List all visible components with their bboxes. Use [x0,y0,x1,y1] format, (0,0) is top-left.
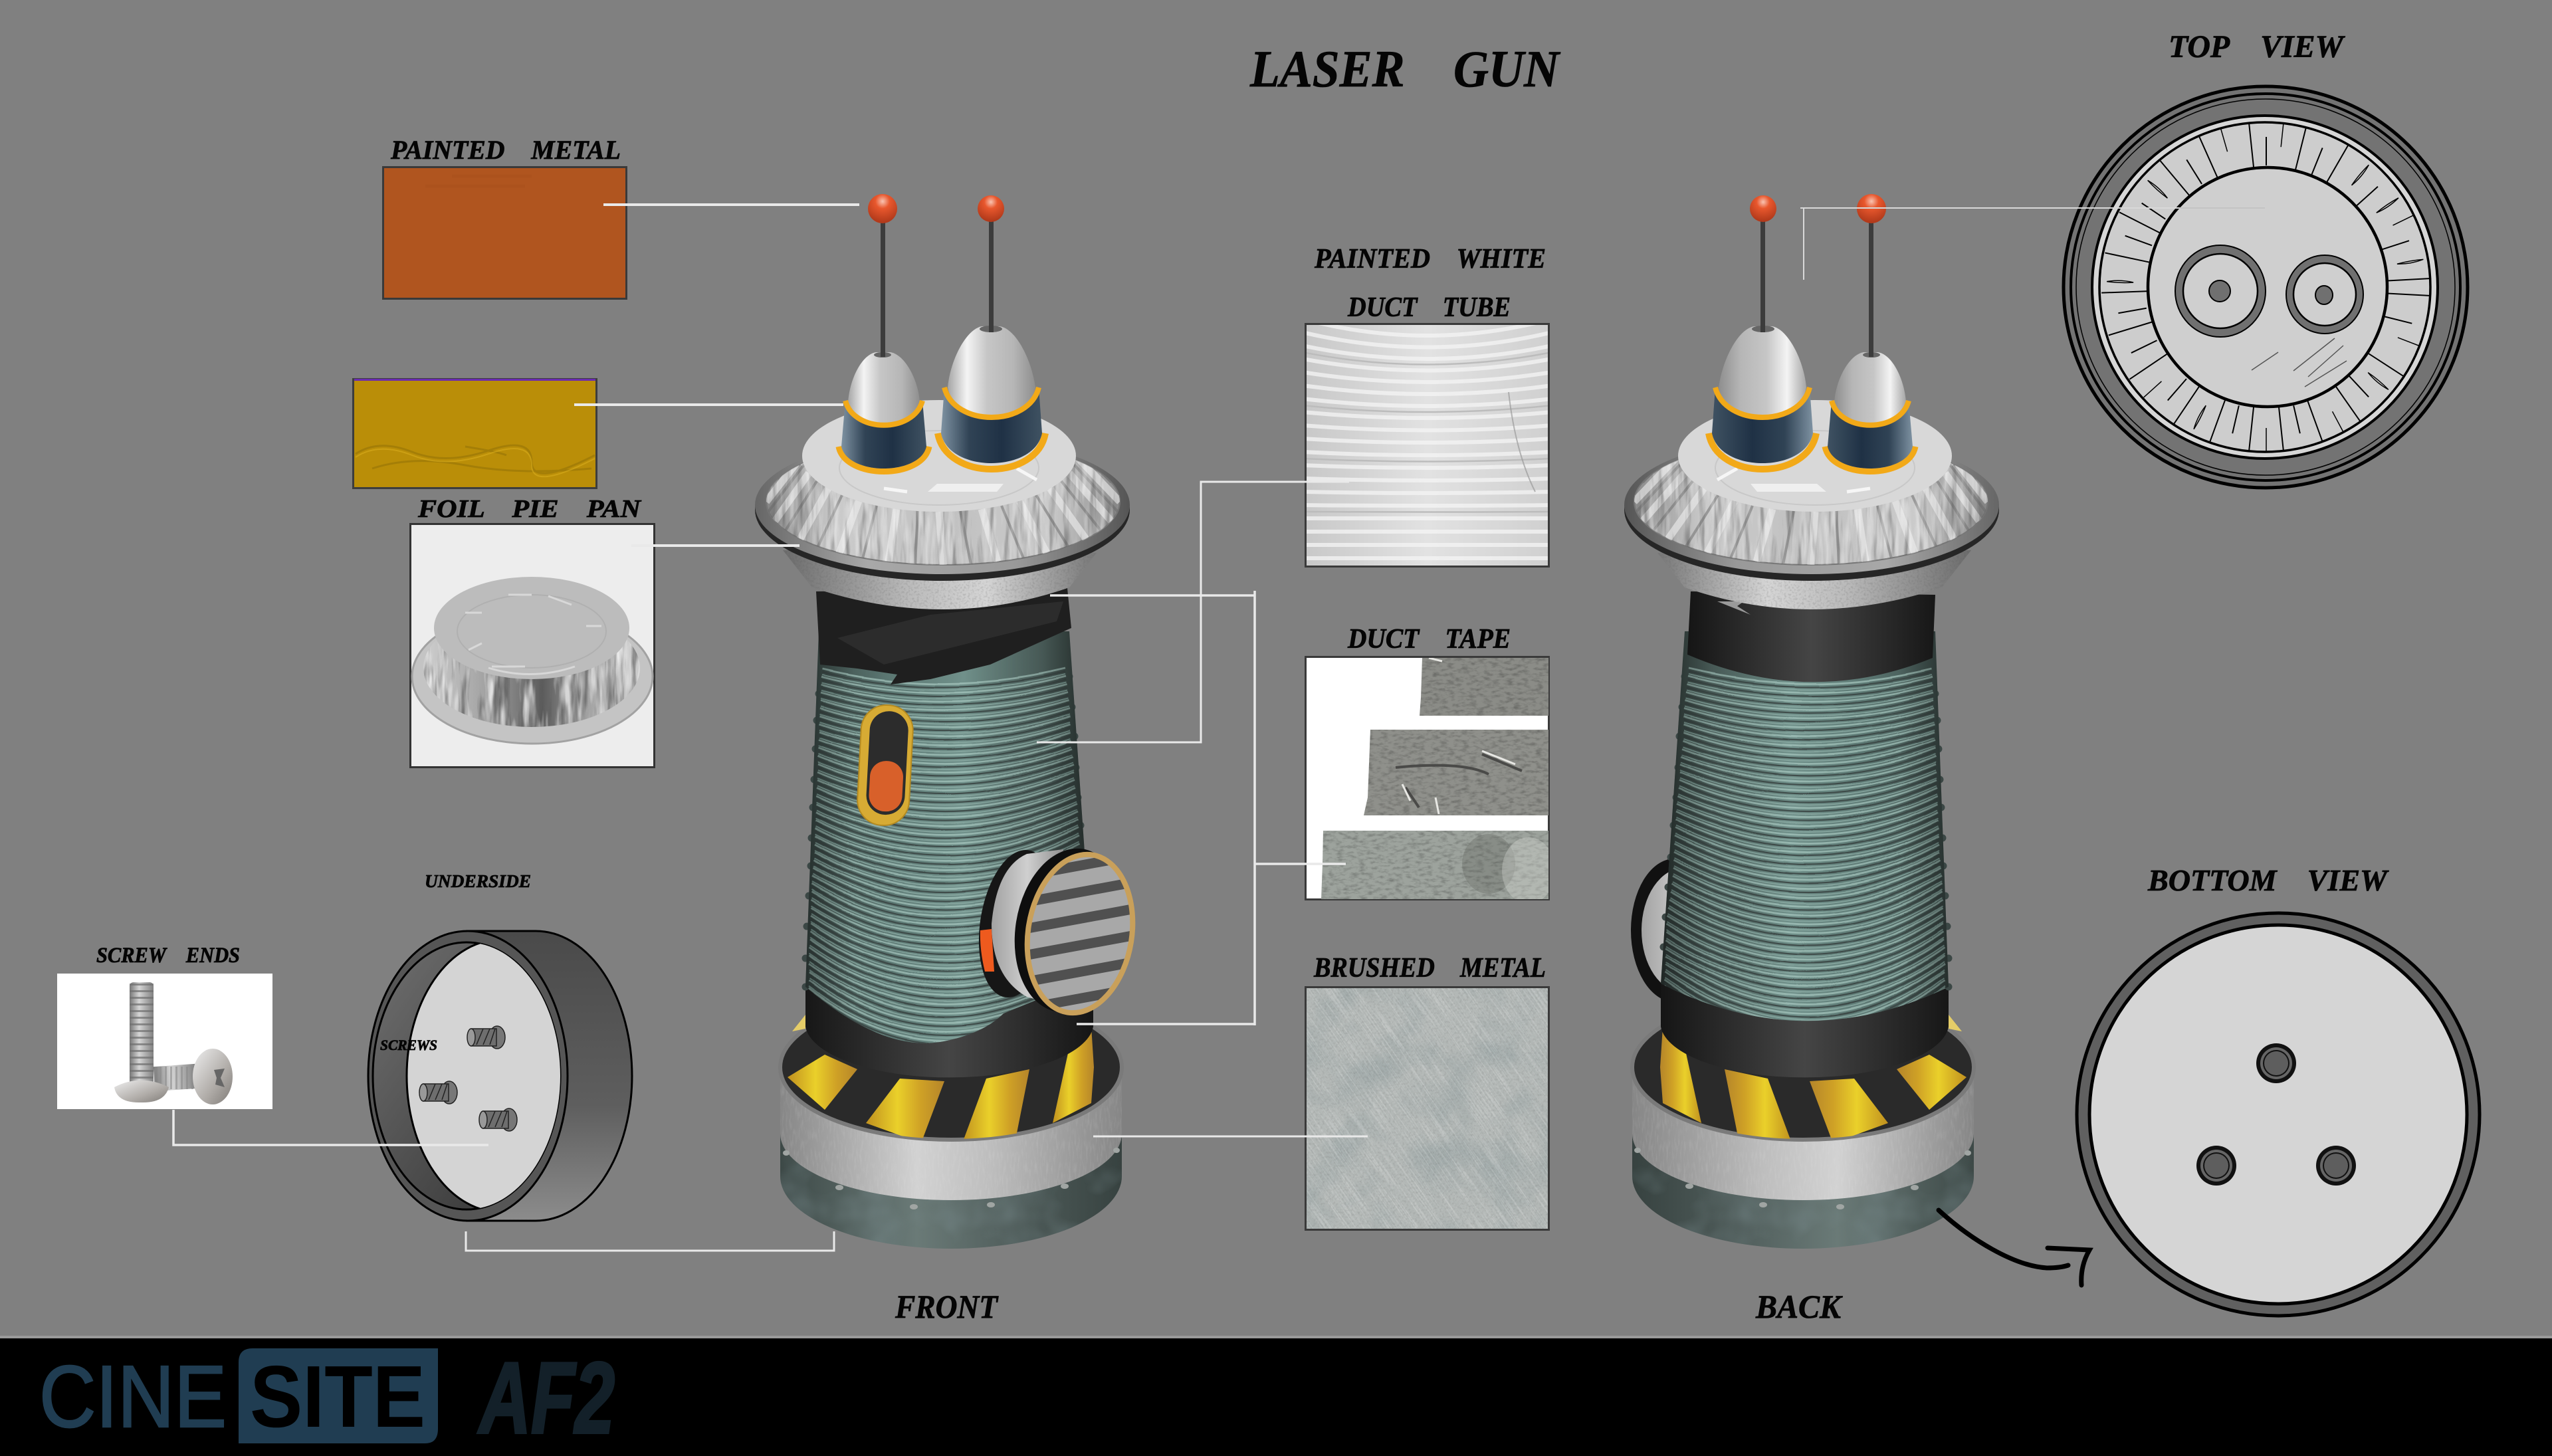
panel: duct tube swatch: DUCT TUBE [1347,292,1511,323]
callout: line into top view [1800,208,2265,280]
upper duct tape wrap [816,588,1071,684]
panel: foil pie pan photo [411,495,654,767]
nozzle: right [2286,255,2363,334]
logo: cinesite: SITE [250,1348,425,1445]
illustration: underside ring [368,931,632,1221]
label: back: BACK [1755,1288,1843,1325]
title: LASER GUN [1249,40,1561,98]
logo: cinesite: CINE [39,1348,227,1445]
label: underside: UNDERSIDE [425,871,531,891]
arrow to bottom view [1939,1210,2089,1285]
panel: screw ends photo [57,944,272,1109]
panel: duct tape swatch [1305,624,1555,904]
panel: duct tube swatch: PAINTED WHITE [1314,244,1546,274]
panel: top view: TOP VIEW [2169,29,2345,64]
label: screws: SCREWS [380,1037,437,1053]
panel: bottom view: BOTTOM VIEW [2147,863,2389,897]
panel: duct tube swatch [1303,244,1552,566]
callout lines [173,205,1368,1251]
panel: brushed metal swatch [1305,958,1550,1231]
panel: brushed metal swatch: BRUSHED METAL [1313,953,1546,984]
panel: top view [2064,29,2468,488]
label: front: FRONT [895,1288,999,1325]
mirrored gun body [1624,194,1999,1249]
orange switch [856,704,914,827]
panel: painted metal swatch [383,135,626,299]
panel: foil pie pan photo: FOIL PIE PAN [417,495,642,523]
footer bar [0,1336,2552,1456]
illustration: back view of gun [1624,194,1999,1249]
panel: painted metal swatch: PAINTED METAL [390,135,621,165]
side port stub behind tube [1631,859,1727,1002]
base drum [780,984,1122,1249]
panel: bottom view [2077,863,2480,1316]
panel: duct tape swatch: DUCT TAPE [1347,624,1511,655]
illustration: front view of gun [755,194,1144,1249]
panel: screw ends photo: SCREW ENDS [96,944,240,968]
radial foil creases [2101,123,2431,452]
foil pan top with nozzles and antennas [755,194,1130,617]
logo: af2: AF2 [477,1342,615,1455]
coiled duct tube [801,631,1085,1043]
side port with grille [978,848,1135,1015]
panel: gold paint swatch [354,379,597,488]
logo: cinesite [39,1348,438,1445]
nozzle: left [2175,245,2266,337]
